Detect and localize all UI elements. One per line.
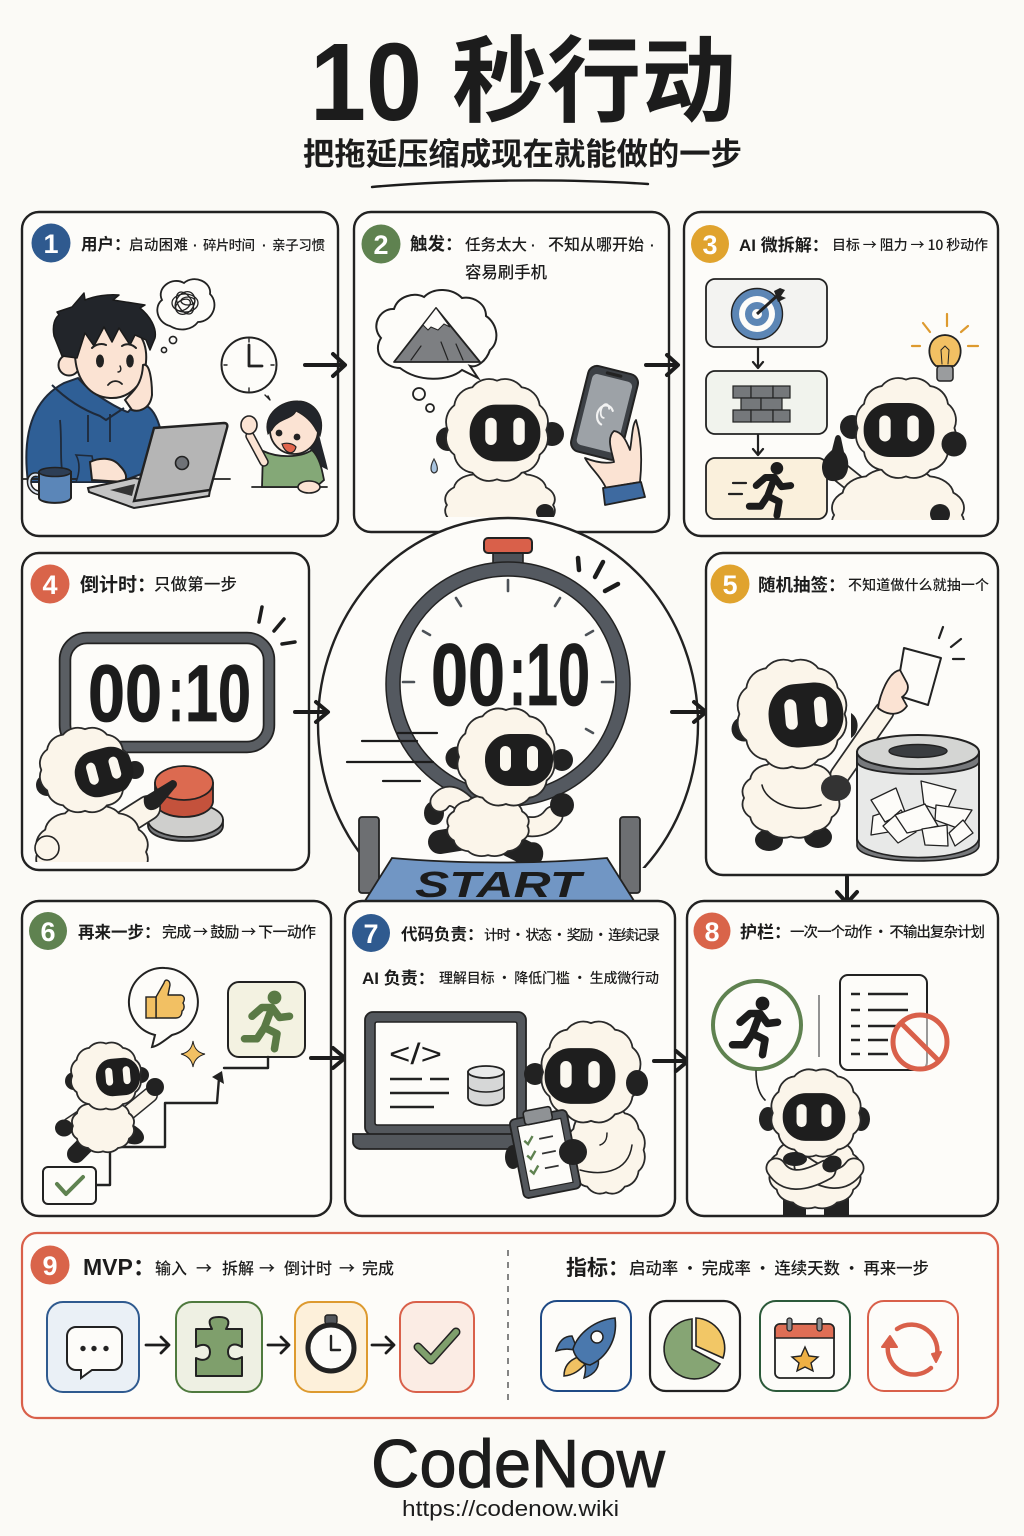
heading 3: AI 微拆解： xyxy=(739,236,829,255)
staircase with arrow xyxy=(96,1057,268,1185)
red button xyxy=(148,766,223,841)
mascot hand xyxy=(559,1139,587,1165)
icon box: breakdown puzzle xyxy=(176,1302,262,1392)
illustration: waving child xyxy=(241,401,328,493)
icon box: rocket xyxy=(541,1301,631,1391)
panel 5: random draw xyxy=(706,553,998,875)
heading 3: 目标 → 阻力 → 10 秒动作 xyxy=(832,235,988,255)
heading 2: · xyxy=(531,237,536,253)
panel 8: guardrails xyxy=(687,901,998,1217)
panel 1: user xyxy=(22,212,338,536)
laptop with code xyxy=(353,1012,540,1149)
paper slip xyxy=(896,627,964,705)
heading 5: 随机抽签： xyxy=(758,575,846,595)
icon: phone in hand xyxy=(569,364,645,505)
badge 8 xyxy=(694,912,730,950)
central stopwatch section xyxy=(318,518,698,930)
heading 1 xyxy=(81,234,326,255)
countdown display: 00 xyxy=(88,649,162,739)
step: target xyxy=(706,279,827,347)
website url: https://codenow.wiki xyxy=(402,1496,619,1521)
speed lines xyxy=(347,733,437,781)
mascot: pointing xyxy=(822,377,966,520)
stopwatch xyxy=(393,538,623,799)
heading 7 code: 代码负责： xyxy=(401,925,484,944)
heading metrics: 指标： xyxy=(566,1257,629,1280)
countdown display: : xyxy=(168,649,184,739)
sweat drop xyxy=(431,459,437,473)
badge 6: 6 xyxy=(40,917,56,947)
heading 2: 不知从哪开始 xyxy=(548,231,644,255)
heading metrics: 启动率 · 完成率 · 连续天数 · 再来一步 xyxy=(629,1255,929,1279)
heading 2 xyxy=(410,231,655,283)
heading 1: 用户： xyxy=(81,234,130,254)
heading 2: · xyxy=(650,237,655,253)
heading 1: 亲子习惯 xyxy=(272,234,326,254)
arrow 7 to 8 xyxy=(654,1051,688,1071)
arrow: target to wall xyxy=(753,348,763,368)
heading 2: 触发： xyxy=(410,234,462,254)
icon: complex plan forbidden xyxy=(840,975,947,1070)
step: running action xyxy=(706,458,827,519)
panel 3: AI breakdown xyxy=(684,212,998,561)
heading 5 xyxy=(758,575,989,595)
arrow 2 to 3 xyxy=(646,355,678,375)
badge 3 xyxy=(691,225,729,263)
outer circle xyxy=(316,516,700,868)
panel 6: one more step xyxy=(22,901,331,1216)
heading MVP: → xyxy=(259,1255,275,1279)
brand logo: CodeNow xyxy=(371,1426,666,1502)
heading MVP: 完成 xyxy=(362,1255,394,1279)
heading 1: 碎片时间 xyxy=(203,234,255,254)
title: 秒行动 xyxy=(452,29,736,134)
panel 4: countdown xyxy=(22,553,309,898)
icon: clock xyxy=(222,338,276,400)
panel 7: code and AI xyxy=(345,901,675,1216)
heading 1: 启动困难 xyxy=(129,234,188,255)
badge 1 xyxy=(32,224,70,262)
heading MVP xyxy=(83,1254,394,1280)
heading MVP: MVP： xyxy=(83,1254,156,1280)
mascot: arms crossed xyxy=(759,1069,870,1217)
illustration: worried parent at laptop xyxy=(22,293,327,508)
thumbs up bubble xyxy=(129,968,198,1047)
heading MVP: 倒计时 xyxy=(284,1255,332,1279)
icon box: input chat xyxy=(47,1302,139,1392)
icon: light bulb xyxy=(912,314,978,381)
heading 2: 任务太大 xyxy=(465,233,527,255)
subtitle: 把拖延压缩成现在就能做的一步 xyxy=(303,137,742,172)
heading 2: 容易刷手机 xyxy=(465,259,548,283)
divider line xyxy=(818,995,820,1057)
heading 4: 倒计时： xyxy=(80,574,156,596)
timer digits xyxy=(431,625,590,724)
heading 4 xyxy=(80,571,237,596)
arrow xyxy=(268,1337,289,1353)
heading 6: 再来一步： xyxy=(78,922,160,942)
running icon box xyxy=(228,982,305,1057)
arrow 4 to center xyxy=(295,702,328,722)
heading 6: 完成 → 鼓励 → 下一动作 xyxy=(162,921,316,942)
icon box: countdown stopwatch xyxy=(295,1302,367,1392)
arrow xyxy=(372,1337,394,1353)
arrow 5 to 8 xyxy=(837,877,857,903)
icon box: calendar xyxy=(760,1301,850,1391)
sparkle xyxy=(181,1041,205,1067)
heading 3 xyxy=(739,235,988,255)
step: brick wall xyxy=(706,371,827,434)
timer digits: 10 xyxy=(526,625,590,724)
mascot: with clipboard xyxy=(505,1022,648,1194)
mascot: drawing a slip xyxy=(732,660,908,851)
heading 7 AI: 理解目标 · 降低门槛 · 生成微行动 xyxy=(439,968,659,988)
arrow center to 5 xyxy=(672,702,706,722)
heading 7 AI: AI 负责： xyxy=(362,969,435,988)
start banner with posts: START xyxy=(415,864,585,905)
icon box: pie chart xyxy=(650,1301,740,1391)
timer digits: 00 xyxy=(431,625,505,724)
heading 1: · xyxy=(193,237,198,253)
icon: single action circle xyxy=(713,981,801,1100)
arrow xyxy=(146,1337,169,1353)
heading 6 xyxy=(78,921,316,942)
title xyxy=(310,21,736,144)
countdown display xyxy=(65,607,295,747)
badge 9: 9 xyxy=(42,1251,58,1281)
arrow 6 to 7 xyxy=(311,1048,345,1068)
panel 9: MVP and metrics xyxy=(22,1233,998,1418)
subtitle underline xyxy=(372,180,648,187)
icon: database xyxy=(468,1066,504,1106)
mascot: running xyxy=(424,708,574,871)
badge 7 xyxy=(352,914,390,952)
heading 5: 不知道做什么就抽一个 xyxy=(848,575,989,595)
icon box: repeat xyxy=(868,1301,958,1391)
heading MVP: 拆解 xyxy=(222,1255,254,1279)
heading MVP: 输入 xyxy=(155,1255,187,1279)
jar of slips xyxy=(857,735,979,861)
checkbox xyxy=(43,1167,96,1204)
badge 2 xyxy=(362,224,400,264)
title: 10 xyxy=(310,21,422,144)
mascot: worried xyxy=(436,378,564,517)
mascot: climbing xyxy=(55,1043,164,1154)
badge 1: 1 xyxy=(43,229,59,259)
dashed divider xyxy=(507,1250,509,1400)
countdown display: 10 xyxy=(185,649,251,739)
heading MVP: → xyxy=(339,1255,355,1279)
heading 7 code xyxy=(401,925,660,945)
badge 7: 7 xyxy=(363,919,379,949)
start banner with posts xyxy=(359,817,640,905)
badge 8: 8 xyxy=(704,917,720,947)
badge 3: 3 xyxy=(702,230,718,260)
arrow 1 to 2 xyxy=(305,354,345,376)
icon: tangled thought bubble xyxy=(157,279,214,353)
badge 4 xyxy=(30,564,70,604)
badge 2: 2 xyxy=(373,230,389,260)
badge 9 xyxy=(30,1246,70,1284)
timer digits: : xyxy=(509,625,526,724)
heading 7 code: 计时 · 状态 · 奖励 · 连续记录 xyxy=(484,925,660,945)
heading 1: · xyxy=(262,237,267,253)
clipboard checklist xyxy=(508,1103,581,1199)
icon box: done check xyxy=(400,1302,474,1392)
mascot: pressing button xyxy=(34,726,177,862)
heading 4: 只做第一步 xyxy=(154,571,237,595)
badge 6 xyxy=(29,912,67,950)
badge 5 xyxy=(710,564,750,604)
arrow: wall to action xyxy=(753,435,763,455)
heading 8: 护栏： xyxy=(740,923,791,942)
badge 4: 4 xyxy=(42,570,58,600)
laptop with code: </> xyxy=(389,1038,442,1071)
badge 5: 5 xyxy=(722,570,738,600)
heading 8: 一次一个动作 · 不输出复杂计划 xyxy=(790,921,985,942)
heading MVP: → xyxy=(196,1255,212,1279)
panel 2: trigger xyxy=(354,212,669,541)
icon: mountain thought bubble xyxy=(376,290,496,412)
